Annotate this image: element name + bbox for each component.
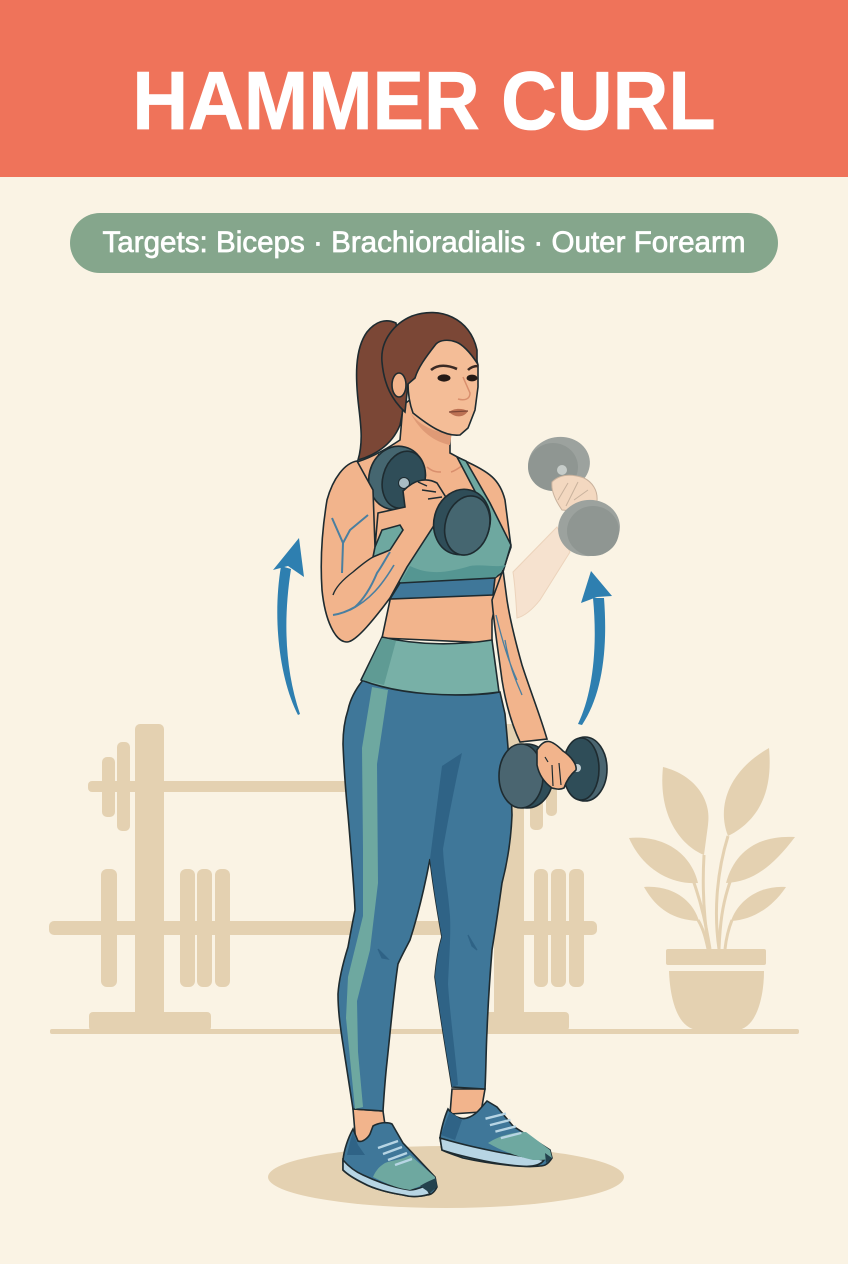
front shoe <box>343 1123 437 1196</box>
target muscles pill <box>70 213 778 273</box>
waistband <box>361 637 499 695</box>
ponytail <box>357 321 405 460</box>
header banner <box>0 0 848 177</box>
motion arrow left <box>273 538 304 715</box>
rear shoe <box>440 1101 552 1167</box>
lowered arm with dumbbell <box>492 570 607 808</box>
face details <box>431 366 478 416</box>
arm veins <box>332 515 390 615</box>
legs <box>338 680 512 1145</box>
front ankle <box>353 1109 386 1145</box>
potted plant <box>629 748 795 1030</box>
strap over shoulder <box>378 449 392 465</box>
motion arrow right <box>578 571 612 725</box>
arm silhouette <box>321 461 447 642</box>
neck and torso <box>357 385 511 643</box>
strap wedge between arm segments <box>373 525 403 557</box>
elbow crease <box>333 557 373 595</box>
sports top <box>375 457 511 583</box>
title: HAMMER CURL <box>132 54 716 147</box>
collar bones <box>427 465 463 472</box>
waistband shading <box>362 638 396 685</box>
knee creases <box>378 935 477 959</box>
target muscles pill: Targets: Biceps · Brachioradialis · Outer Forearm <box>102 226 746 259</box>
gym background: squat rack and barbell <box>49 724 799 1034</box>
ghost raised arm with dumbbell <box>513 432 624 618</box>
curled arm with dumbbell <box>321 440 498 642</box>
head <box>382 313 478 435</box>
inner leg shading <box>430 753 462 1087</box>
side stripe <box>346 687 388 1109</box>
top band <box>390 578 495 599</box>
rear ankle <box>450 1089 485 1114</box>
neck shadow <box>410 412 452 445</box>
floor shadow <box>268 1146 624 1208</box>
leggings <box>338 680 512 1111</box>
top shading <box>400 565 506 583</box>
